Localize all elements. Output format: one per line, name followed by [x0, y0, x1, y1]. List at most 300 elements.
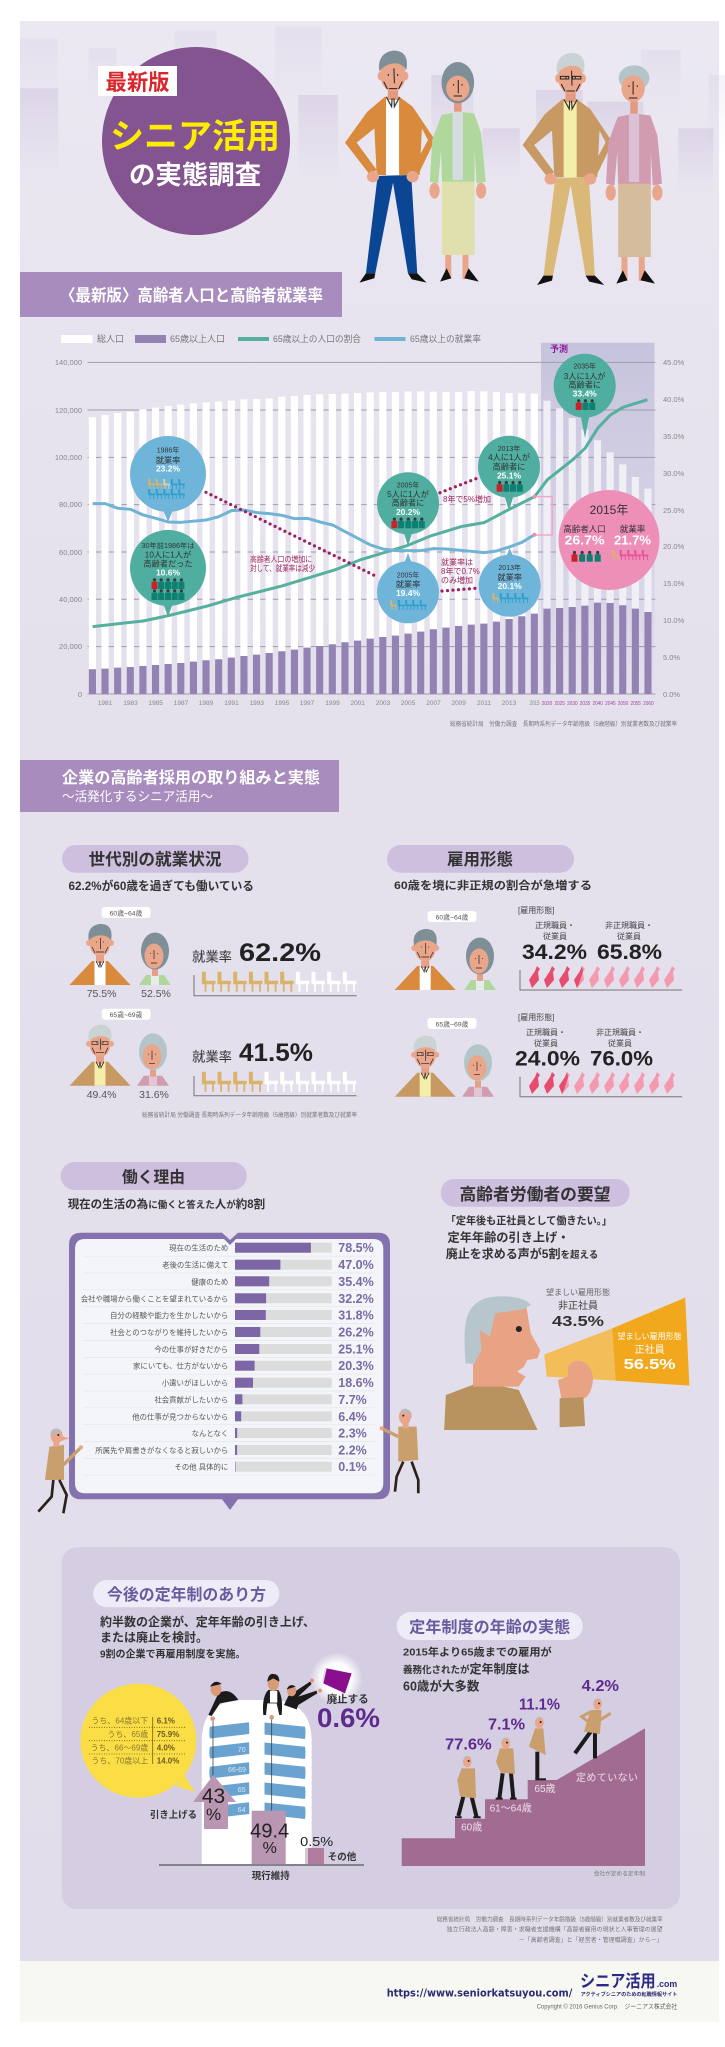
- callout: 2005 share of seniors: 5人に1人が: [387, 489, 429, 499]
- year axis labels: 2035: [580, 701, 590, 707]
- sub heading: 60歳を境に非正規の割合が急増する: [394, 878, 592, 892]
- section heading: corporate hiring: ～活発化するシニア活用～: [62, 789, 213, 804]
- walking figures: [455, 1698, 611, 1817]
- dotted trend lines: [206, 478, 477, 591]
- callout: 2035 share of seniors: [554, 354, 616, 438]
- busts 65-69: [395, 1036, 494, 1097]
- row 14: その他 具体的に: [175, 1463, 228, 1472]
- forecast shaded band: [541, 343, 654, 694]
- stair percent labels: 4.2%: [582, 1678, 619, 1695]
- quote text: 廃止を求める声が5割を超える: [446, 1246, 598, 1261]
- title circle: [102, 47, 290, 235]
- yellow speech bubble: [80, 1684, 196, 1798]
- year axis labels: 1987: [174, 700, 189, 707]
- year axis labels: 1981: [98, 700, 113, 707]
- callout: 2013 share of seniors: 25.1%: [497, 470, 521, 480]
- label: regular: [618, 1331, 682, 1373]
- year axis labels: 2060: [643, 701, 654, 707]
- bar: maintain 49.4 percent: [250, 1811, 289, 1864]
- row 1: 78.5%: [338, 1241, 374, 1255]
- annotation: population vs rate: [250, 554, 315, 573]
- label: non regular: 望ましい雇用形態: [546, 1287, 610, 1297]
- breakdown 65-69: [雇用形態]: [518, 1012, 554, 1022]
- text block: future of retirement: 約半数の企業が、定年年齢の引き上げ、: [100, 1614, 315, 1629]
- right axis labels: 5.0%: [663, 653, 680, 662]
- year axis labels: [98, 700, 654, 707]
- employment rate 41.5: 就業率: [192, 1050, 232, 1064]
- chart source: 総務省統計局 労働力調査 長期時系列データ年齢階級（5歳階級）別就業者数及び就業率: [450, 720, 677, 728]
- percent labels 65-69: 31.6%: [139, 1089, 169, 1101]
- stair labels: 61～64歳: [490, 1803, 532, 1815]
- breakdown 60-64: [518, 905, 662, 964]
- year axis labels: 1991: [224, 700, 239, 707]
- white building: [202, 1700, 312, 1864]
- year axis labels: 2050: [618, 701, 628, 707]
- year axis labels: 2045: [605, 701, 616, 707]
- footer logo: アクティブシニアのための転職情報サイト: [581, 1991, 677, 1998]
- breakdown 60-64: 従業員: [543, 931, 567, 941]
- label: raise: 引き上げる: [150, 1809, 197, 1821]
- white building: 64: [238, 1807, 246, 1814]
- source notes: 独立行政法人高齢・障害・求職者支援機構「高齢者雇用の現状と人事管理の展望: [447, 1926, 663, 1934]
- section heading: corporate hiring: [20, 760, 339, 812]
- figure: 65: [529, 1717, 546, 1779]
- percent labels 60-64: 75.5%: [87, 988, 116, 1000]
- label: non regular: [546, 1287, 610, 1330]
- busts 65-69: [70, 1025, 169, 1086]
- label: regular: 望ましい雇用形態: [618, 1331, 682, 1341]
- breakdown 60-64: 正規職員・: [535, 920, 575, 930]
- callout: 2015: 高齢者人口: [563, 524, 606, 534]
- age tag 65-69: 65歳~69歳: [436, 1020, 469, 1028]
- bar: other 0.5 percent: その他: [328, 1851, 357, 1863]
- grid and bars: [88, 362, 655, 694]
- chair chart 41.5: [194, 1072, 357, 1096]
- percent labels 65-69: 49.4%: [87, 1089, 116, 1101]
- row 2: [162, 1258, 374, 1272]
- business people on the roof: [208, 1652, 363, 1721]
- year axis labels: 1985: [148, 700, 163, 707]
- pill heading: 世代別の就業状況: [88, 850, 222, 869]
- footer logo: .com: [657, 1979, 677, 1990]
- text block: future of retirement: 9割の企業で再雇用制度を実施。: [100, 1648, 246, 1661]
- person: throwing: [284, 1679, 322, 1709]
- year axis labels: 2030: [567, 701, 578, 707]
- stair labels: [461, 1772, 638, 1834]
- man in orange jacket: [345, 51, 435, 283]
- employment rate 62.2: [192, 939, 321, 967]
- row 13: 2.2%: [338, 1444, 367, 1458]
- row 4: [81, 1292, 374, 1306]
- yellow speech bubble: うち、70歳以上: [91, 1756, 148, 1766]
- arrow: raise 43 percent: [193, 1775, 236, 1829]
- age tag 60-64: 60歳~64歳: [110, 908, 143, 918]
- callout: 2013 share of seniors: 2013年: [498, 444, 520, 453]
- bar: other 0.5 percent: 0.5%: [300, 1834, 334, 1849]
- row 4: 32.2%: [338, 1292, 374, 1306]
- callout: 2035 share of seniors: 2035年: [573, 362, 596, 370]
- label: regular: 56.5%: [624, 1356, 676, 1373]
- callout: 1986 share of seniors: 10.6%: [156, 568, 180, 578]
- arrow: raise 43 percent: 43: [202, 1785, 225, 1808]
- right axis labels: 0.0%: [663, 690, 680, 699]
- section heading: population and employment rate: 〈最新版〉高齢者人口と高齢者就業率: [60, 285, 323, 305]
- pill heading: future of retirement: 今後の定年制のあり方: [107, 1585, 266, 1604]
- callout: 1986 share of seniors: 10人に1人が: [145, 550, 191, 560]
- stair percent labels: [445, 1678, 619, 1753]
- row 11: 6.4%: [338, 1410, 367, 1424]
- age tag 60-64: 60歳~64歳: [436, 912, 469, 922]
- callout: 2013 employment rate: 就業率: [497, 572, 522, 582]
- year axis labels: 2011: [477, 700, 491, 707]
- callout: 2015: 26.7%: [564, 532, 605, 548]
- percent labels 60-64: 52.5%: [141, 988, 171, 1000]
- row 11: [132, 1410, 367, 1424]
- yellow speech bubble: うち、66～69歳: [91, 1742, 148, 1752]
- pill heading: [441, 1179, 630, 1207]
- label: regular: 正社員: [635, 1343, 665, 1356]
- figure: left: [38, 1429, 83, 1513]
- badge: latest edition: 最新版: [106, 70, 170, 95]
- section heading: population and employment rate: [20, 272, 342, 317]
- text block: actual retirement age: 60歳が大多数: [403, 1679, 480, 1694]
- callout: 1986 employment rate: 就業率: [156, 455, 180, 465]
- left axis labels: 0: [78, 690, 82, 699]
- row 1: 現在の生活のため: [169, 1244, 228, 1253]
- copyright: Copyright © 2016 Genius Corp. ジーニアス株式会社: [537, 2001, 678, 2010]
- breakdown 65-69: 従業員: [534, 1038, 558, 1048]
- callout: 2013 employment rate: [479, 548, 541, 617]
- footer logo: シニア活用: [580, 1972, 656, 1991]
- sub title: の実態調査: [129, 160, 261, 190]
- pill heading: 雇用形態: [447, 850, 513, 869]
- callout: 2015: 21.7%: [614, 532, 651, 548]
- annotation: 8 years 0.7 percent: 就業率は: [441, 557, 473, 567]
- illustration: man with megaphone: [444, 1296, 689, 1430]
- figures pulling the book: [38, 1409, 418, 1513]
- line: share of 65+: [93, 400, 647, 627]
- row 2: 老後の生活に備えて: [162, 1261, 228, 1270]
- age tag 65-69: 65歳~69歳: [110, 1010, 143, 1019]
- woman in green cardigan: [429, 62, 486, 282]
- percent labels 65-69: [87, 1089, 169, 1101]
- pill heading: [62, 845, 248, 873]
- chart: population bars and rate lines: [55, 343, 685, 707]
- row 8: 家にいても、仕方がないから: [133, 1362, 228, 1371]
- breakdown 60-64: 非正規職員・: [605, 920, 653, 930]
- row 12: 2.3%: [338, 1426, 367, 1440]
- callout: 2005 employment rate: 就業率: [396, 579, 420, 589]
- year axis labels: 2009: [451, 700, 466, 707]
- yellow speech bubble: 14.0%: [157, 1757, 179, 1766]
- badge: latest edition: [98, 66, 177, 96]
- panel: reasons for working: [38, 1162, 418, 1513]
- woman in pink cardigan: [606, 65, 662, 284]
- age tag 60-64: [102, 907, 151, 918]
- callout: 2013 employment rate: 20.1%: [498, 581, 522, 591]
- employment rate 62.2: 62.2%: [239, 939, 321, 967]
- callout: 1986 employment rate: 1986年: [157, 446, 179, 454]
- year axis labels: 2055: [630, 701, 641, 707]
- source note: 総務省統計局 労働調査 長期時系列データ年齢階級（5歳階級）別就業者数及び就業率: [142, 1111, 357, 1119]
- annotation: 8 years 0.7 percent: 8年で0.7%: [441, 566, 480, 576]
- row 12: なんとなく: [192, 1429, 228, 1438]
- stair percent labels: 11.1%: [519, 1696, 560, 1713]
- chart legend: 65歳以上の人口の割合: [273, 333, 361, 344]
- yellow speech bubble: 6.1%: [157, 1717, 175, 1726]
- breakdown 65-69: 76.0%: [590, 1048, 653, 1071]
- sub heading: 現在の生活の為に働くと答えた人が約8割: [68, 1197, 265, 1211]
- quote text: 「定年後も正社員として働きたい。」: [446, 1214, 612, 1227]
- chart legend: [61, 333, 481, 344]
- right axis labels: 25.0%: [663, 506, 685, 515]
- annotation: 8 years 0.7 percent: [441, 557, 480, 585]
- callout: 2035 share of seniors: 33.4%: [573, 388, 597, 398]
- row 3: [191, 1275, 374, 1289]
- right axis labels: 30.0%: [663, 469, 685, 478]
- right axis labels: [663, 358, 685, 699]
- year axis labels: 1989: [199, 700, 214, 707]
- panel: employment type: [387, 845, 682, 1097]
- chart legend: 総人口: [97, 333, 124, 344]
- year axis labels: 2025: [554, 701, 565, 707]
- source notes: －「高齢者調査」と「経営者・管理職調査」から－」: [519, 1936, 663, 1944]
- age tag 60-64: [428, 911, 476, 922]
- row 5: [110, 1308, 374, 1322]
- yellow speech bubble: うち、64歳以下: [91, 1716, 148, 1726]
- year axis labels: 2001: [350, 700, 365, 707]
- annotation: 8 years 0.7 percent: のみ増加: [441, 575, 473, 585]
- figure: right: [380, 1409, 418, 1493]
- row 14: 0.1%: [338, 1460, 367, 1474]
- person: in centre: [263, 1674, 282, 1720]
- stair labels: 65歳: [534, 1783, 556, 1795]
- text block: future of retirement: [100, 1614, 315, 1661]
- row 6: [110, 1326, 374, 1340]
- white building: 65: [238, 1787, 246, 1794]
- callout: 2013 share of seniors: 高齢者に: [493, 462, 525, 472]
- left axis labels: [55, 358, 82, 699]
- year axis labels: 2003: [376, 700, 391, 707]
- pill heading: [61, 1162, 247, 1190]
- callout: 2005 share of seniors: [377, 472, 439, 546]
- stair percent labels: 77.6%: [445, 1736, 492, 1753]
- man in tan jacket: [523, 53, 613, 285]
- callout: 2005 share of seniors: 高齢者に: [392, 498, 424, 508]
- stair labels: 60歳: [461, 1822, 482, 1834]
- callout: 2015: 2015年: [590, 503, 628, 517]
- row 3: 健康のため: [191, 1277, 228, 1286]
- row 12: [192, 1426, 367, 1440]
- arrow: raise 43 percent: %: [206, 1805, 221, 1824]
- pill heading: future of retirement: [93, 1580, 279, 1607]
- year axis labels: 1997: [300, 700, 315, 707]
- callout: 2005 employment rate: 19.4%: [396, 588, 420, 598]
- figure: 60: [455, 1756, 481, 1817]
- row 11: 他の仕事が見つからないから: [132, 1412, 228, 1421]
- age tag 65-69: [428, 1018, 476, 1029]
- callout: 2013 share of seniors: [478, 436, 540, 511]
- main title: シニア活用: [110, 118, 280, 156]
- glow behind card: [311, 1652, 363, 1704]
- callout: 1986 share of seniors: 高齢者だった: [143, 558, 193, 568]
- baseline: [159, 1864, 364, 1866]
- pill heading: 高齢者労働者の要望: [460, 1184, 610, 1204]
- row 8: 20.3%: [338, 1359, 374, 1373]
- callout: 2035 share of seniors: 3人に1人が: [564, 371, 606, 381]
- breakdown 65-69: 正規職員・: [526, 1027, 566, 1037]
- breakdown 65-69: [515, 1012, 653, 1071]
- callout: 1986 employment rate: 23.2%: [156, 464, 180, 474]
- panel: retirement system: [62, 1547, 680, 1909]
- callout: 2005 share of seniors: 2005年: [397, 480, 419, 490]
- right axis labels: 35.0%: [663, 432, 685, 441]
- row 6: 社会とのつながりを維持したいから: [110, 1328, 228, 1337]
- pill heading: actual retirement age: 定年制度の年齢の実態: [409, 1618, 570, 1637]
- left axis labels: 80,000: [59, 500, 82, 509]
- panel: senior workers' requests: [441, 1179, 689, 1430]
- yellow speech bubble: 4.0%: [157, 1743, 175, 1752]
- breakdown 60-64: [雇用形態]: [518, 905, 554, 915]
- title block: [98, 47, 290, 235]
- year axis labels: 2020: [542, 701, 552, 707]
- row 8: [133, 1359, 374, 1373]
- stair labels: 定めていない: [576, 1772, 638, 1784]
- white building: 66-69: [228, 1767, 246, 1774]
- stair percent labels: 7.1%: [488, 1716, 525, 1733]
- callout: 2035 share of seniors: 高齢者に: [568, 380, 601, 390]
- quote text: [446, 1214, 612, 1261]
- row 1: [169, 1241, 374, 1255]
- text block: actual retirement age: [403, 1646, 552, 1694]
- stairs: [402, 1728, 645, 1866]
- text block: future of retirement: または廃止を検討。: [100, 1630, 208, 1645]
- callout: 2015: [558, 490, 660, 590]
- label: maintain: 現行維持: [252, 1870, 290, 1882]
- left axis labels: 60,000: [59, 548, 82, 557]
- thrown card: [323, 1668, 352, 1693]
- callout: 2015: 就業率: [620, 524, 646, 534]
- left axis labels: 140,000: [55, 358, 82, 367]
- right axis labels: 40.0%: [663, 395, 685, 404]
- yellow speech bubble: 75.9%: [157, 1730, 179, 1739]
- yellow speech bubble: うち、65歳: [107, 1729, 148, 1739]
- age tag 65-69: [102, 1009, 151, 1020]
- right axis labels: 10.0%: [663, 616, 685, 625]
- pill heading: [387, 845, 574, 873]
- tie chart 60-64: [520, 966, 682, 990]
- person: leaning: [208, 1682, 238, 1721]
- row 5: 31.8%: [338, 1308, 374, 1322]
- illustration: seniors standing: [345, 51, 662, 285]
- callout: 2013 employment rate: 2013年: [498, 563, 521, 572]
- annotation: population vs rate: 高齢者人口の増加に: [250, 554, 312, 564]
- chart legend: 65歳以上の就業率: [410, 333, 481, 344]
- callout: 1986 share of seniors: 30年前1986年は: [142, 541, 194, 550]
- employment rate 62.2: 就業率: [192, 950, 232, 964]
- figure: no limit: [575, 1698, 611, 1758]
- row 9: [162, 1376, 374, 1390]
- year axis labels: 1993: [250, 700, 264, 707]
- row 3: 35.4%: [338, 1275, 374, 1289]
- left axis labels: 40,000: [59, 595, 82, 604]
- year axis labels: 2007: [426, 700, 441, 707]
- row 14: [175, 1460, 367, 1474]
- row 7: 今の仕事が好きだから: [154, 1345, 228, 1354]
- chair chart 62.2: [194, 972, 357, 996]
- row 7: 25.1%: [338, 1342, 374, 1356]
- left axis labels: 120,000: [55, 406, 82, 415]
- section heading: corporate hiring: 企業の高齢者採用の取り組みと実態: [62, 768, 320, 787]
- label: non regular: 非正社員: [558, 1299, 598, 1312]
- right axis labels: 45.0%: [663, 358, 685, 367]
- row 4: 会社や職場から働くことを望まれているから: [81, 1294, 228, 1303]
- label: abolish: 廃止する: [327, 1693, 369, 1706]
- source notes: [437, 1916, 663, 1944]
- figure: 61-64: [496, 1738, 517, 1799]
- footer url: https://www.seniorkatsuyou.com/: [387, 1987, 573, 2000]
- left axis labels: 20,000: [59, 642, 82, 651]
- year axis labels: 1999: [325, 700, 340, 707]
- bar: other 0.5 percent: [300, 1834, 357, 1864]
- annotation: population vs rate: 対して、就業率は減少: [250, 563, 315, 573]
- right axis labels: 15.0%: [663, 579, 685, 588]
- row 9: 小遣いがほしいから: [162, 1379, 228, 1388]
- year axis labels: 2013: [502, 700, 517, 707]
- connector to 2015 callout: [535, 497, 552, 535]
- callout: 1986 share of seniors: [130, 530, 206, 617]
- row 10: 社会貢献がしたいから: [154, 1395, 228, 1404]
- row 13: 所属先や肩書きがなくなると寂しいから: [95, 1446, 228, 1455]
- callout: 2005 employment rate: [377, 553, 439, 623]
- tie chart 65-69: [520, 1072, 682, 1097]
- panel: employment by generation: [62, 845, 357, 1119]
- note: stairs: 会社が定める定年制: [594, 1869, 645, 1877]
- row 6: 26.2%: [338, 1326, 374, 1340]
- row 10: 7.7%: [338, 1393, 367, 1407]
- callout: 2013 share of seniors: 4人に1人が: [488, 452, 530, 462]
- row 7: [154, 1342, 374, 1356]
- right axis labels: 20.0%: [663, 542, 685, 551]
- city skyline: [20, 27, 725, 195]
- reasons bar chart: [81, 1241, 375, 1475]
- busts 60-64: [395, 929, 496, 990]
- forecast label: 予測: [550, 343, 568, 354]
- label: abolish: 0.6%: [317, 1703, 380, 1733]
- breakdown 60-64: 65.8%: [597, 941, 662, 964]
- left axis labels: 100,000: [55, 453, 82, 462]
- year axis labels: 1995: [275, 700, 290, 707]
- text block: actual retirement age: 2015年より65歳までの雇用が: [403, 1646, 552, 1659]
- breakdown 65-69: 非正規職員・: [596, 1027, 644, 1037]
- row 5: 自分の経験や能力を生かしたいから: [110, 1311, 228, 1320]
- row 10: [154, 1393, 367, 1407]
- label: non regular: 43.5%: [552, 1313, 604, 1330]
- employment rate 41.5: [192, 1039, 313, 1067]
- chart legend: 65歳以上人口: [170, 333, 225, 344]
- footer logo: [580, 1972, 677, 1998]
- annotation: 8 years 5 percent: 8年で5%増加: [443, 494, 491, 504]
- callout: 2005 share of seniors: 20.2%: [396, 507, 420, 517]
- callout: 2005 employment rate: 2005年: [397, 570, 419, 580]
- callout: 1986 employment rate: [130, 436, 206, 522]
- breakdown 65-69: 24.0%: [515, 1048, 580, 1071]
- year axis labels: 2015: [530, 701, 540, 707]
- quote text: 定年年齢の引き上げ・: [448, 1230, 570, 1245]
- year axis labels: 1983: [123, 700, 138, 707]
- busts 60-64: [70, 924, 171, 985]
- sub heading: 62.2%が60歳を過ぎても働いている: [68, 878, 254, 893]
